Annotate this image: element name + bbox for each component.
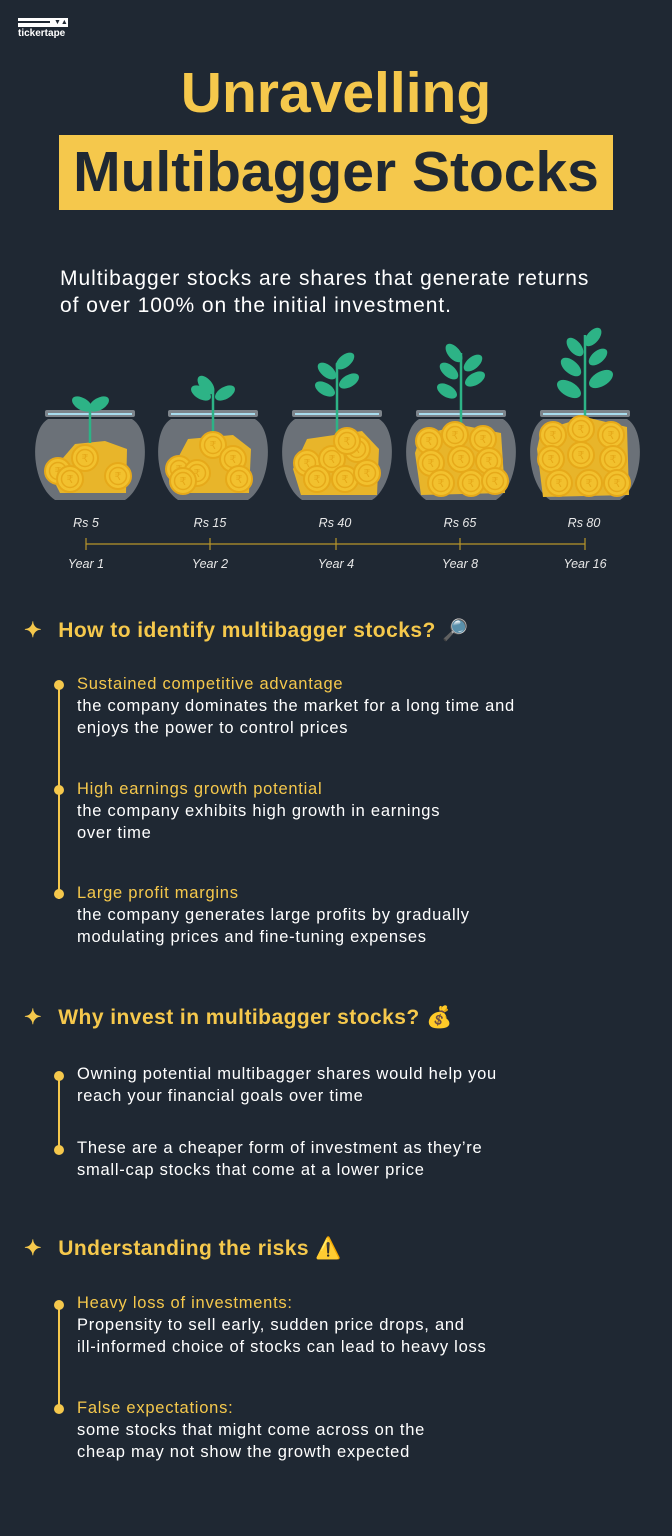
heading: why invest: ✦: [24, 1006, 42, 1029]
heading: identify: ✦: [24, 619, 42, 642]
intro text: of over 100% on the initial investment.: [60, 294, 452, 317]
price labels: Rs 5: [73, 516, 99, 530]
intro text: [60, 267, 589, 317]
item: competitive advantage: enjoys the power to control prices: [77, 719, 348, 737]
heading: identify: How to identify multibagger stocks? 🔎: [58, 619, 469, 642]
heading: risks: Understanding the risks ⚠️: [58, 1237, 342, 1260]
year labels: Year 16: [563, 557, 607, 571]
item: heavy loss: ill-informed choice of stocks can lead to heavy loss: [77, 1338, 487, 1356]
price labels: Rs 40: [319, 516, 351, 530]
year labels: [68, 557, 607, 571]
jar 1: [35, 393, 145, 500]
title: Unravelling: [181, 61, 491, 125]
item: false expectations: False expectations:: [77, 1399, 233, 1417]
intro text: Multibagger stocks are shares that generate returns: [60, 267, 589, 290]
price labels: Rs 80: [568, 516, 600, 530]
item: earnings growth: High earnings growth potential: [77, 780, 322, 798]
logo: ▼▲: [54, 19, 68, 26]
year labels: Year 8: [442, 557, 478, 571]
price labels: [73, 516, 600, 530]
price labels: Rs 15: [194, 516, 226, 530]
heading: risks: ✦: [24, 1237, 42, 1260]
item: cheaper: small-cap stocks that come at a lower price: [77, 1161, 425, 1179]
jar 5: [530, 325, 640, 500]
list: risks: [54, 1300, 64, 1414]
item: false expectations: some stocks that might come across on the: [77, 1421, 425, 1439]
item: earnings growth: the company exhibits high growth in earnings: [77, 802, 440, 820]
item: competitive advantage: the company dominates the market for a long time and: [77, 697, 515, 715]
item: false expectations: cheap may not show the growth expected: [77, 1443, 410, 1461]
item: false expectations: [77, 1399, 425, 1461]
heading: why invest: Why invest in multibagger stocks? 💰: [58, 1006, 453, 1029]
list: why: [54, 1071, 64, 1155]
item: heavy loss: Propensity to sell early, sudden price drops, and: [77, 1316, 465, 1334]
price labels: Rs 65: [444, 516, 476, 530]
jar 4: [406, 341, 516, 500]
item: goals: reach your financial goals over time: [77, 1087, 364, 1105]
timeline: [85, 538, 586, 550]
item: earnings growth: over time: [77, 824, 152, 842]
item: goals: Owning potential multibagger shares would help you: [77, 1065, 497, 1083]
item: goals: [77, 1065, 497, 1105]
jar 2: [158, 373, 268, 500]
logo: tickertape: [18, 28, 65, 39]
item: profit margins: the company generates large profits by gradually: [77, 906, 470, 924]
item: profit margins: Large profit margins: [77, 884, 239, 902]
item: cheaper: [77, 1139, 482, 1179]
jars illustration: [35, 328, 640, 500]
item: earnings growth: [77, 780, 440, 842]
item: heavy loss: Heavy loss of investments:: [77, 1294, 293, 1312]
title box: Multibagger Stocks: [73, 140, 599, 204]
year labels: Year 4: [318, 557, 354, 571]
year labels: Year 2: [192, 557, 228, 571]
item: competitive advantage: [77, 675, 515, 737]
item: heavy loss: [77, 1294, 487, 1356]
jar 3: [282, 349, 392, 500]
item: competitive advantage: Sustained competitive advantage: [77, 675, 343, 693]
logo: [18, 18, 68, 39]
item: cheaper: These are a cheaper form of investment as they’re: [77, 1139, 482, 1157]
year labels: Year 1: [68, 557, 104, 571]
list: identify: [54, 680, 64, 899]
item: profit margins: modulating prices and fine-tuning expenses: [77, 928, 427, 946]
item: profit margins: [77, 884, 470, 946]
